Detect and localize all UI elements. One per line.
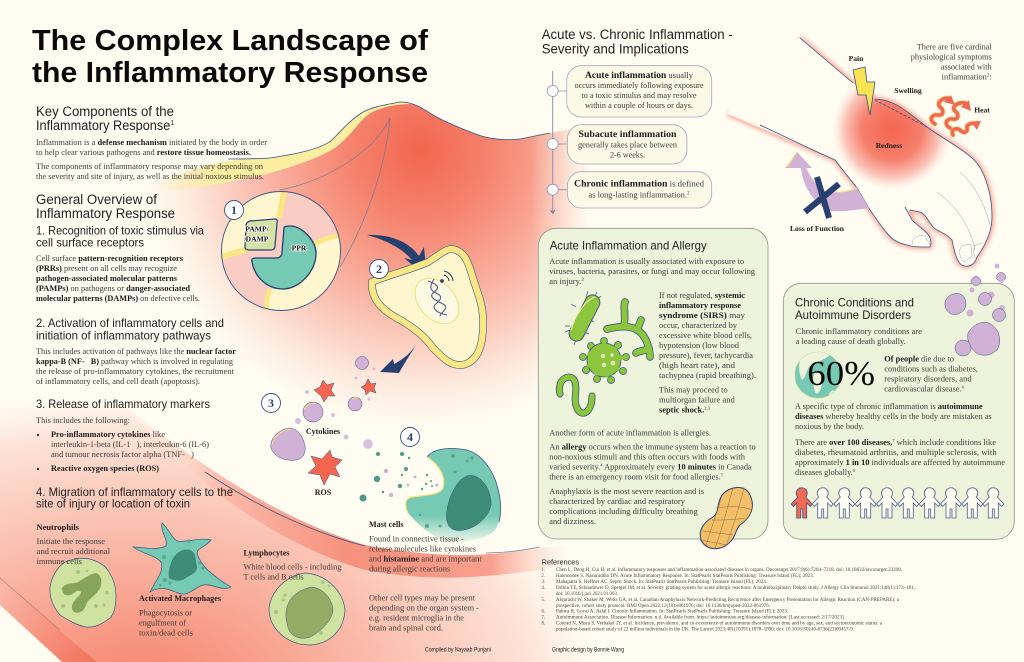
text: activated macrophages: Phagocytosis or — [139, 609, 192, 618]
diagram 2: activated cell with nucleus and DNA — [372, 249, 483, 365]
reference list: Dribin TE, Schnadower D, Spergel JM, et al. Severity grading system for acute allergic reactions: A multidisciplinary Delphi study. J Allergy Clin Immunol 2021;148(1):173–181; — [556, 586, 915, 591]
PPR receptor — [252, 226, 316, 289]
allergy text: An allergy occurs when the immune system has a reaction to — [549, 443, 756, 452]
panel: chronic conditions and autoimmune disorders — [783, 283, 1014, 539]
intro text — [549, 257, 755, 286]
text: other cell types: brain and spinal cord. — [369, 624, 443, 633]
tissue background: lower inflamed area and blood vessel — [0, 400, 640, 662]
SIRS text: septic shock. — [659, 406, 704, 415]
SIRS text: hypotension (low blood — [659, 341, 740, 350]
badge 3 — [262, 394, 280, 412]
text: neutrophils: Neutrophils — [36, 523, 80, 532]
section 2 text: the release of pro-inflammatory cytokines, the recruitment — [36, 367, 235, 376]
autoimmune text — [795, 402, 1005, 477]
autoimmune text: 8 — [853, 468, 856, 473]
credit: compiled by: Compiled by Nayaab Punjani — [425, 648, 491, 654]
icon: lymphocyte — [269, 573, 345, 645]
text: other cell types: depending on the organ system - — [369, 604, 479, 613]
SIRS text: syndrome (SIRS) may — [659, 311, 746, 320]
allergy text: Approximately every — [602, 463, 677, 472]
intro text: viruses, bacteria, parasites, or fungi and may occur following — [549, 267, 755, 276]
section 2 text: This includes activation of pathways like the nuclear factor — [36, 347, 236, 356]
SIRS text: inflammatory response — [659, 301, 741, 310]
text: neutrophils: immune cells — [36, 557, 82, 566]
heading: acute vs chronic: Acute vs. Chronic Inflammation - — [542, 27, 733, 42]
reference list: Mahapatra S, Heffner AC. Septic Shock. In: StatPearls StatPearls Publishing: Treasure Island (FL); 2023. — [556, 580, 767, 585]
references — [542, 559, 915, 633]
badge 1 — [224, 200, 244, 220]
allergy text: varied severity. — [549, 463, 600, 472]
labels: cardinal symptoms: Pain — [849, 54, 864, 63]
SIRS text: If not regulated, systemic — [659, 291, 745, 300]
arrow: cell to markers — [380, 343, 417, 373]
text: mast cells: during allergic reactions — [369, 565, 450, 574]
badge 1: 1 — [231, 203, 237, 217]
section 3 text and bullets: interleukin-1-beta (IL-1 ), interleukin-6 (IL-6) — [51, 440, 209, 449]
stat text: conditions such as diabetes, — [884, 365, 978, 374]
PPR receptor: PPR — [292, 244, 307, 253]
icon: loss of function arrow with cross — [785, 152, 869, 218]
box: acute inflammation: occurs immediately following exposure — [574, 81, 704, 90]
text: mast cells: Mast cells — [369, 520, 404, 529]
intro text — [796, 327, 922, 346]
icon: peanut — [700, 487, 752, 549]
allergy text: 10 minutes in Canada — [677, 463, 752, 472]
labels: cardinal symptoms: Heat — [974, 106, 990, 115]
reference list: Pahwa R, Goyal A, Jialal I. Chronic Inflammation. In: StatPearls StatPearls Publishing: Treasure Island (FL); 2023. — [556, 610, 788, 615]
labels: cardinal symptoms: Loss of Function — [790, 224, 845, 233]
heading: general overview: Inflammatory Response — [36, 206, 175, 221]
title: the Inflammatory Response — [32, 57, 428, 89]
text: mast cells — [369, 520, 482, 574]
tissue background: inflamed skin hill — [140, 102, 602, 450]
badge 4 — [400, 428, 420, 446]
SIRS text: tachypnea (rapid breathing). — [659, 371, 756, 380]
reference list: Hannoodee S, Nasuruddin DN. Acute Inflammatory Response. In: StatPearls StatPearls Publishing: Treasure Island (FL); 2023. — [556, 574, 814, 579]
allergy text: and dizziness. — [549, 517, 596, 526]
icon: heat arrows — [931, 95, 981, 135]
stat text — [884, 355, 978, 394]
autoimmune text: 7 — [892, 438, 895, 443]
allergy text: 5 — [721, 473, 724, 478]
icon: globe — [795, 351, 841, 398]
diagram 1: receptor magnified circle — [221, 191, 341, 311]
section 1 text: (PRRs) present on all cells may recognize — [36, 264, 177, 273]
stat text: cardiovascular disease. — [884, 385, 961, 394]
badge 4: 4 — [407, 430, 413, 444]
released granules — [360, 452, 433, 502]
allergy text: characterized by cardiac and respiratory — [549, 497, 686, 506]
SIRS text: excessive white blood cells, — [659, 331, 752, 340]
credit: graphic design: Graphic design by Bonnie Wang — [552, 648, 624, 654]
section 1 heading — [36, 224, 204, 250]
diagram 4: mast cell degranulating — [360, 448, 501, 542]
text: lymphocytes: Lymphocytes — [244, 549, 290, 558]
text: key components body: to help clear various pathogens and restore tissue homeostasis. — [36, 148, 251, 157]
allergy text: Another form of acute inflammation is allergies. — [549, 429, 711, 438]
text: lymphocytes — [244, 549, 342, 582]
stat text: respiratory disorders, and — [884, 375, 973, 384]
autoimmune text: which include conditions like — [895, 438, 996, 447]
title — [32, 25, 428, 89]
DNA helix — [428, 279, 447, 316]
text: neutrophils: Initiate the response — [36, 537, 105, 546]
intro text: a leading cause of death globally. — [796, 337, 906, 346]
section 3 text and bullets: Pro-inflammatory cytokines like — [51, 430, 165, 439]
text: cardinal symptoms intro: physiological symptoms — [911, 53, 992, 62]
heading: key components: Inflammatory Response — [36, 118, 179, 133]
autoimmune text: noxious by the body. — [795, 422, 864, 431]
heading: acute vs chronic: Severity and Implications — [542, 41, 689, 56]
text: cardinal symptoms intro: associated with — [941, 63, 993, 72]
autoimmune text: diseases globally. — [795, 468, 853, 477]
spirillum — [559, 377, 592, 413]
icon: pain lightning bolt — [853, 67, 875, 115]
allergy text — [549, 429, 756, 526]
text: activated macrophages: toxin/dead cells — [139, 629, 193, 638]
heading: key components: Key Components of the — [36, 104, 174, 119]
text: cardinal symptoms intro: There are five cardinal — [917, 43, 992, 52]
text: cardinal symptoms intro: inflammation — [942, 73, 986, 82]
box: subacute inflammation — [568, 125, 687, 164]
reference list: Alqurashi W, Shaker M, Wells GA, et al. Canadian Anaphylaxis Network-Predicting Recurrence after Emergency Presentation for Allergic Reaction (CAN-PREPARE): a — [556, 598, 900, 603]
heading: key components: 1 — [170, 120, 174, 127]
heading: key components — [36, 104, 174, 133]
icon: activated macrophage — [133, 523, 231, 594]
box: acute inflammation — [567, 66, 712, 117]
text: mast cells: and histamine and are important — [369, 555, 482, 564]
heading: acute vs chronic — [542, 27, 733, 56]
signal icon — [441, 271, 453, 282]
text: key components body: Inflammation is a defense mechanism initiated by the body in order — [36, 138, 267, 147]
box: chronic inflammation: as long-lasting inflammation. — [588, 190, 686, 199]
reference list: 4. — [542, 586, 545, 591]
text: mast cells: release molecules like cytokines — [369, 545, 476, 554]
section 4 heading: site of injury or location of toxin — [36, 497, 190, 511]
reference list: population-based cohort study of 22 million individuals in the UK. The Lancet 2023;401(10391):1878–1890; doi: 10.1016/S0140-6736(23)00457-9. — [556, 628, 854, 633]
box: chronic inflammation: 2 — [687, 191, 690, 196]
timeline — [547, 71, 568, 214]
section 2 text: of inflammatory cells, and cell death (apoptosis). — [36, 377, 200, 386]
text: key components body — [36, 138, 267, 181]
branched fungus — [607, 302, 650, 357]
section 1 text: pathogen-associated molecular patterns — [36, 274, 178, 283]
reference list: Chen L, Deng H, Cui H, et al. Inflammatory responses and inflammation-associated diseases in organs. Oncotarget 2017;9(6):7204–7218. doi: 10.18632/oncotarget.23208. — [556, 568, 902, 573]
section 1 text: (PAMPs) on pathogens or danger-associated — [36, 284, 190, 293]
stat: 60%: 60% — [807, 355, 875, 393]
text: activated macrophages: Activated Macrophages — [139, 594, 222, 603]
text: key components body: The components of inflammatory response may vary depending on — [36, 162, 264, 171]
badge 2: 2 — [376, 262, 382, 276]
section 2 text — [36, 347, 236, 386]
reference list: 3. — [542, 580, 545, 585]
reference list — [542, 568, 915, 633]
autoimmune text: There are over 100 diseases, — [795, 438, 891, 447]
intro text: Acute inflammation is usually associated with exposure to — [549, 257, 744, 266]
heading: general overview: General Overview of — [36, 192, 157, 207]
stat text: Of people die due to — [884, 355, 954, 364]
bacillus — [565, 291, 603, 345]
section 2 heading: initiation of inflammatory pathways — [36, 328, 211, 342]
PAMP/DAMP ligand: DAMP — [246, 235, 269, 244]
text: cardinal symptoms intro: 2 — [987, 74, 990, 79]
text: neutrophils — [36, 523, 111, 566]
reference list: Conrad N, Misra S, Verbakel JY, et al. Incidence, prevalence, and co-occurrence of autoimmune disorders over time and by age, sex, and socioeconomic status: a — [556, 622, 883, 627]
allergy text: there is an emergency room visit for food allergies. — [549, 473, 719, 482]
box: subacute inflammation: generally takes place between — [578, 140, 678, 149]
diagram 3: cytokines and ROS — [271, 356, 376, 497]
PAMP/DAMP ligand — [245, 219, 277, 250]
badge 3: 3 — [268, 396, 274, 410]
reference list: doi: 10.1016/j.jaci.2021.01.003. — [556, 592, 618, 597]
SIRS text: 2,3 — [704, 406, 711, 412]
text: activated macrophages — [139, 594, 222, 638]
allergy text: Anaphylaxis is the most severe reaction and is — [549, 487, 704, 496]
virus — [580, 338, 630, 384]
text: lymphocytes: White blood cells - including — [244, 563, 342, 572]
pictogram: 1 in 10 people — [791, 488, 1004, 518]
text: activated macrophages: engulfment of — [139, 619, 186, 628]
icon: pathogens — [559, 291, 650, 413]
SIRS text: This may proceed to — [659, 386, 728, 395]
text: other cell types: e.g. resident microglia in the — [369, 614, 464, 623]
SIRS text: pressure), fever, tachycardia — [659, 351, 753, 360]
text: lymphocytes: T cells and B cells — [244, 573, 304, 582]
reference list: 6. — [542, 610, 545, 615]
reference list: 1. — [542, 568, 545, 573]
section 2 heading — [36, 316, 224, 342]
SIRS text: multiorgan failure and — [659, 396, 736, 405]
section 3 text and bullets: and tumour necrosis factor alpha (TNF- ) — [51, 450, 194, 459]
arrow: receptor to cell — [367, 235, 427, 277]
labels: cardinal symptoms — [790, 54, 990, 233]
allergy text: complications including difficulty breathing — [549, 507, 698, 516]
diagram 3: cytokines and ROS: ROS — [315, 488, 332, 497]
box: acute inflammation: to a toxic stimulus and may resolve — [582, 91, 697, 100]
reference list: Autoimmune Association. Disease Information. n.d. Available from: https://autoimmune.org/disease-information/ [Last accessed: 2/17/2023]. — [556, 616, 845, 621]
allergy text: non-noxious stimuli and this often occurs with foods with — [549, 453, 746, 462]
section 1 heading: 1. Recognition of toxic stimulus via — [36, 224, 204, 238]
title: The Complex Landscape of — [32, 25, 428, 57]
SIRS text: occur, characterized by — [659, 321, 738, 330]
reference list: 8. — [542, 622, 545, 627]
panel heading: Acute Inflammation and Allergy — [550, 239, 707, 253]
references heading: References — [542, 559, 580, 566]
icon: neutrophil — [50, 558, 116, 627]
text: mast cells: Found in connective tissue - — [369, 535, 464, 544]
autoimmune text: diabetes, rheumatoid arthritis, and multiple sclerosis, with — [795, 448, 998, 457]
section 1 heading: cell surface receptors — [36, 236, 144, 250]
text: other cell types — [369, 594, 479, 633]
stat text: 6 — [962, 385, 965, 390]
box: subacute inflammation: Subacute inflammation — [578, 130, 677, 140]
panel heading: Autoimmune Disorders — [795, 308, 911, 322]
section 3 text and bullets: Reactive oxygen species (ROS) — [51, 464, 159, 473]
labels: cardinal symptoms: Redness — [876, 141, 902, 150]
section 4 heading — [36, 485, 233, 511]
autoimmune text: A specific type of chronic inflammation is autoimmune — [795, 402, 983, 411]
section 1 text: molecular patterns (DAMPs) on defective cells. — [36, 294, 200, 303]
text: neutrophils: and recruit additional — [36, 547, 111, 556]
box: acute inflammation: within a couple of hours or days. — [585, 101, 693, 110]
text: key components body: the severity and site of injury, as well as the initial noxious stimulus. — [36, 172, 264, 181]
PAMP/DAMP ligand: PAMP/ — [245, 225, 270, 234]
reference list: 5. — [542, 598, 545, 603]
intro text: 2 — [581, 278, 585, 283]
intro text: an injury. — [549, 277, 581, 286]
reference list: prospective, cohort study protocol. BMJ Open 2022;12(10):e061976; doi: 10.1136/bmjopen-2022-061976. — [556, 604, 770, 609]
illustration: inflamed arm and hand — [728, 38, 992, 266]
text: cardinal symptoms intro — [911, 43, 993, 82]
section 2 text: kappa-B (NF- B) pathway which is involved in regulating — [36, 357, 233, 366]
diagram 3: cytokines and ROS: Cytokines — [306, 427, 340, 436]
section 3 text and bullets: This includes the following: — [36, 416, 130, 425]
box: chronic inflammation: Chronic inflammation is defined — [574, 180, 705, 190]
reference list: 7. — [542, 616, 545, 621]
autoimmune text: diseases whereby healthy cells in the body are mistaken as — [795, 412, 992, 421]
SIRS text — [659, 291, 756, 415]
section 2 heading: 2. Activation of inflammatory cells and — [36, 316, 224, 330]
section 1 text — [36, 254, 200, 303]
box: subacute inflammation: 2-6 weeks. — [610, 150, 645, 159]
section 4 heading: 4. Migration of inflammatory cells to the — [36, 485, 233, 499]
panel heading — [795, 296, 914, 322]
labels: cardinal symptoms: Swelling — [894, 86, 922, 95]
box: chronic inflammation — [568, 172, 712, 208]
section 1 text: Cell surface pattern-recognition receptors — [36, 254, 184, 263]
section 3 heading: 3. Release of inflammatory markers — [36, 397, 210, 411]
icon: purple autoimmune cell cluster — [945, 264, 1006, 356]
section 3 text and bullets — [36, 416, 209, 473]
heading: general overview — [36, 192, 175, 221]
text: cardinal symptoms intro: : — [989, 73, 992, 82]
allergy text: 4 — [600, 463, 603, 468]
text: other cell types: Other cell types may be present — [369, 594, 476, 603]
reference list: 2. — [542, 574, 545, 579]
panel: acute inflammation and allergy — [538, 228, 768, 539]
SIRS text: (high heart rate), and — [659, 361, 736, 370]
badge 2 — [370, 260, 388, 278]
panel heading: Chronic Conditions and — [795, 296, 914, 310]
box: acute inflammation: Acute inflammation usually — [585, 71, 694, 81]
intro text: Chronic inflammatory conditions are — [796, 327, 922, 336]
autoimmune text: approximately 1 in 10 individuals are affected by autoimmune — [795, 458, 1005, 467]
